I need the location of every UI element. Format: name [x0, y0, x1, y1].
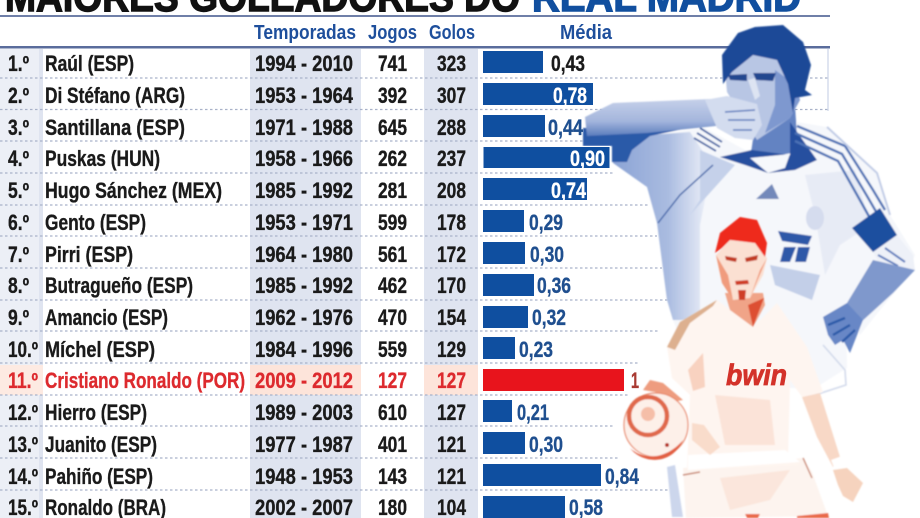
table header	[254, 22, 613, 44]
Raúl forearm	[847, 260, 915, 323]
row 10: Míchel: 559	[378, 337, 407, 362]
Raúl adidas logo	[756, 184, 779, 199]
row 7: Pirri: 561	[378, 242, 407, 267]
row 13: Juanito: 1977 - 1987	[255, 432, 353, 457]
row 4: Puskas: 4.º	[8, 146, 29, 171]
row 13: Juanito: 121	[437, 432, 466, 457]
row 11: Cristiano Ronaldo, highlighted: Cristiano Ronaldo (POR)	[45, 368, 245, 393]
Raúl hand	[705, 96, 762, 140]
row 2: Di Stéfano: 0,78	[553, 83, 587, 108]
row 5: Hugo Sánchez	[8, 178, 587, 203]
row 3: Santillana: Santillana (ESP)	[45, 115, 185, 140]
row 3: Santillana: 288	[437, 115, 466, 140]
row 8: Butragueño: 462	[378, 273, 407, 298]
row 7: Pirri: 1964 - 1980	[255, 242, 353, 267]
row 12: Hierro	[8, 400, 549, 425]
row 10: Míchel: 1984 - 1996	[255, 337, 353, 362]
row 11: Cristiano Ronaldo, highlighted: 127	[437, 368, 466, 393]
row 9: Amancio: 154	[437, 305, 467, 330]
Raúl armband	[852, 208, 897, 252]
row 11: Cristiano Ronaldo, highlighted: 2009 - 2012	[255, 368, 353, 393]
row 14: Pahiño: 121	[437, 464, 466, 489]
row 3: Santillana: 0,44	[548, 115, 584, 140]
table header: Temporadas	[254, 22, 356, 44]
row 11: Cristiano Ronaldo, highlighted: 127	[378, 368, 407, 393]
row 2: Di Stéfano: 2.º	[8, 83, 29, 108]
row 2: Di Stéfano: 1953 - 1964	[255, 83, 354, 108]
row 2: Di Stéfano: 307	[437, 83, 466, 108]
Ronaldo neck	[725, 293, 765, 327]
Raúl face	[725, 54, 800, 140]
row 12: Hierro: 610	[378, 400, 407, 425]
row 5: Hugo Sánchez: 208	[437, 178, 466, 203]
row 14: Pahiño: 0,84	[605, 464, 640, 489]
row 10: Míchel: 10.º	[8, 337, 38, 362]
Raúl lower sleeve	[873, 235, 915, 270]
row 13: Juanito: 0,30	[529, 432, 563, 457]
row 8: Butragueño	[8, 273, 571, 298]
row 6: Gento	[8, 210, 563, 235]
Ronaldo shirt shading	[688, 353, 705, 391]
row 10: Míchel	[8, 337, 553, 362]
row 4: Puskas: 262	[378, 146, 407, 171]
row 6: Gento: Gento (ESP)	[45, 210, 146, 235]
row 1: Raúl: 323	[437, 51, 466, 76]
row 9: Amancio: 470	[378, 305, 407, 330]
row 8: Butragueño: Butragueño (ESP)	[45, 273, 193, 298]
row 1: Raúl: 1994 - 2010	[255, 51, 353, 76]
Ronaldo shorts	[683, 458, 828, 518]
row 13: Juanito	[8, 432, 563, 457]
row 1: Raúl: 0,43	[551, 51, 585, 76]
row 4: Puskas: 0,90	[570, 146, 605, 171]
row 4: Puskas: 237	[437, 146, 466, 171]
row 12: Hierro: Hierro (ESP)	[45, 400, 147, 425]
row 8: Butragueño: 0,36	[537, 273, 571, 298]
row 3: Santillana	[8, 115, 584, 140]
row 8: Butragueño: 8.º	[8, 273, 29, 298]
row 14: Pahiño: Pahiño (ESP)	[45, 464, 153, 489]
table header: Média	[560, 22, 613, 44]
row 12: Hierro: 127	[437, 400, 466, 425]
row 1: Raúl	[8, 51, 585, 76]
Ronaldo forearm	[643, 380, 683, 402]
row 8: Butragueño: 170	[437, 273, 466, 298]
Raúl crest	[806, 206, 824, 230]
row 6: Gento: 6.º	[8, 210, 29, 235]
row 7: Pirri: Pirri (ESP)	[45, 242, 133, 267]
row 7: Pirri: 7.º	[8, 242, 29, 267]
row 6: Gento: 0,29	[529, 210, 563, 235]
row 7: Pirri: 172	[437, 242, 466, 267]
row 7: Pirri: 0,30	[530, 242, 564, 267]
row 2: Di Stéfano: Di Stéfano (ARG)	[45, 83, 185, 108]
Raúl eyes	[728, 73, 776, 81]
row 8: Butragueño: 1985 - 1992	[255, 273, 353, 298]
row 5: Hugo Sánchez: 5.º	[8, 178, 29, 203]
row 10: Míchel: Míchel (ESP)	[45, 337, 155, 362]
Raúl sleeve stripes near neck	[694, 128, 722, 151]
row 1: Raúl: 1.º	[8, 51, 29, 76]
Raúl shirt	[613, 122, 915, 388]
illustration: Raúl kissing his hand, blue tint	[583, 25, 915, 517]
Ronaldo ball	[624, 393, 688, 460]
row 5: Hugo Sánchez: 281	[378, 178, 407, 203]
Raúl sleeve stripes	[795, 126, 885, 220]
row 10: Míchel: 129	[437, 337, 466, 362]
Ronaldo hair	[715, 217, 767, 257]
row 9: Amancio: 9.º	[8, 305, 29, 330]
row 14: Pahiño: 1948 - 1953	[255, 464, 353, 489]
row 9: Amancio: 0,32	[532, 305, 566, 330]
Raúl hair	[722, 25, 812, 113]
illustration: Cristiano Ronaldo, red tint	[624, 217, 863, 518]
row 13: Juanito: 13.º	[8, 432, 38, 457]
Ronaldo eyes	[725, 255, 758, 262]
row 12: Hierro: 12.º	[8, 400, 38, 425]
row 2: Di Stéfano: 392	[378, 83, 407, 108]
row 1: Raúl: 741	[378, 51, 407, 76]
Ronaldo shirt	[667, 300, 823, 470]
Raúl shirt side shading	[613, 132, 712, 320]
row 14: Pahiño: 143	[378, 464, 407, 489]
row 9: Amancio	[8, 305, 566, 330]
Raúl seam	[658, 165, 713, 223]
row 13: Juanito: 401	[378, 432, 407, 457]
row 5: Hugo Sánchez: 1985 - 1992	[255, 178, 353, 203]
row 3: Santillana: 645	[378, 115, 407, 140]
row 5: Hugo Sánchez: 0,74	[551, 178, 587, 203]
row 13: Juanito: Juanito (ESP)	[45, 432, 157, 457]
Ronaldo arm	[802, 393, 840, 467]
row 6: Gento: 599	[378, 210, 407, 235]
row 12: Hierro: 1989 - 2003	[255, 400, 353, 425]
table header: Golos	[429, 22, 475, 44]
row 9: Amancio: 1962 - 1976	[255, 305, 353, 330]
row 3: Santillana: 3.º	[8, 115, 29, 140]
row 7: Pirri	[8, 242, 564, 267]
row 1: Raúl: Raúl (ESP)	[45, 51, 134, 76]
Raúl arm underside	[583, 126, 697, 162]
Ronaldo face	[716, 240, 767, 300]
row 10: Míchel: 0,23	[519, 337, 553, 362]
row 6: Gento: 1953 - 1971	[255, 210, 353, 235]
row 4: Puskas	[8, 146, 610, 171]
Raúl undershirt	[750, 154, 790, 173]
row 2: Di Stéfano	[8, 83, 593, 108]
Raúl shirt lower outline	[815, 345, 846, 395]
sponsor text bwin: bwin	[726, 359, 787, 392]
row 12: Hierro: 0,21	[517, 400, 549, 425]
row 6: Gento: 178	[437, 210, 466, 235]
row 14: Pahiño	[8, 464, 640, 489]
row 3: Santillana: 1971 - 1988	[255, 115, 353, 140]
row 14: Pahiño: 14.º	[8, 464, 38, 489]
row 11: Cristiano Ronaldo, highlighted: 1	[631, 368, 639, 393]
Raúl neck	[750, 105, 798, 160]
table header: Jogos	[368, 22, 417, 44]
row 15: Ronaldo	[8, 495, 603, 518]
Raúl second hand	[823, 303, 863, 353]
Ronaldo hand	[692, 423, 720, 455]
Raúl collar	[720, 122, 817, 173]
Raúl arm	[585, 99, 725, 136]
row 11: Cristiano Ronaldo, highlighted: 11.º	[8, 368, 38, 393]
Raúl lower body strip	[667, 465, 683, 517]
Raúl sponsor	[778, 231, 812, 262]
row 4: Puskas: Puskas (HUN)	[45, 146, 160, 171]
Ronaldo mouth and chin	[735, 280, 749, 300]
row 5: Hugo Sánchez: Hugo Sánchez (MEX)	[45, 178, 222, 203]
row 4: Puskas: 1958 - 1966	[255, 146, 353, 171]
row 11: Cristiano Ronaldo, highlighted	[8, 368, 639, 393]
row 9: Amancio: Amancio (ESP)	[45, 305, 168, 330]
